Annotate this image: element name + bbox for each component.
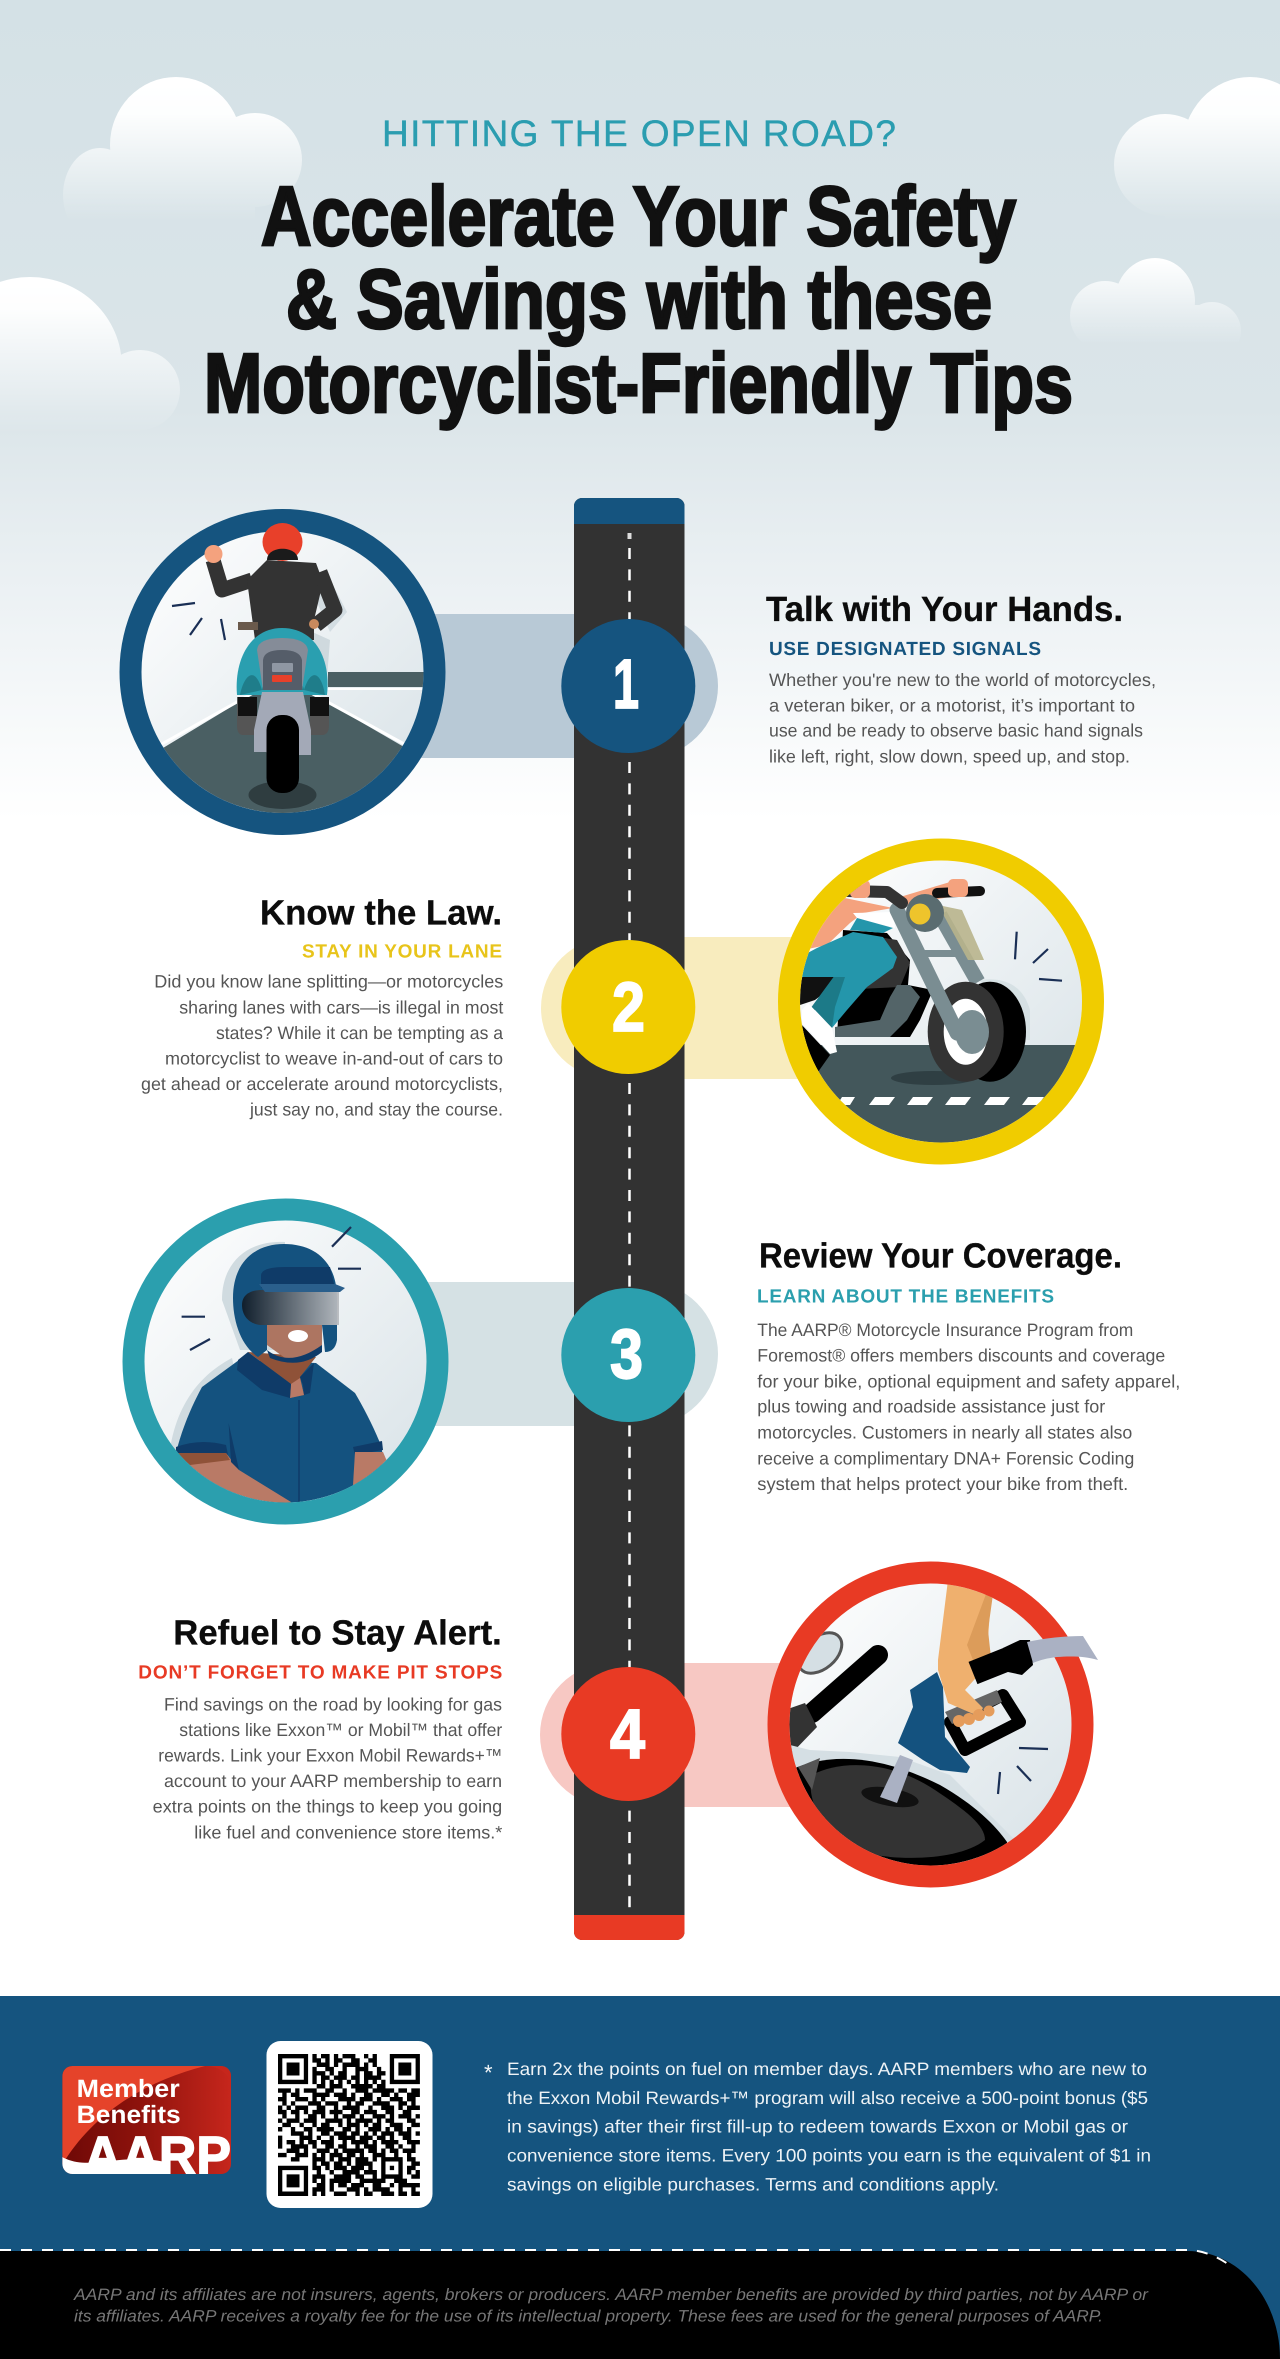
body copy: Did you know lane splitting—or motorcycles bbox=[154, 972, 503, 992]
body copy: Foremost® offers members discounts and coverage bbox=[757, 1346, 1165, 1366]
body copy bbox=[757, 1320, 1180, 1494]
footnote: in savings) after their first fill-up to redeem towards Exxon or Mobil gas or bbox=[507, 2116, 1128, 2136]
footnote: the Exxon Mobil Rewards+™ program will also receive a 500-point bonus ($5 bbox=[507, 2088, 1148, 2108]
step 1 text bbox=[766, 590, 1156, 766]
connector band 3 bbox=[400, 1282, 718, 1426]
illustration 3: smiling rider with helmet bbox=[134, 1210, 438, 1520]
subheading: STAY IN YOUR LANE bbox=[302, 942, 502, 963]
subheading: LEARN ABOUT THE BENEFITS bbox=[757, 1287, 1054, 1308]
sky background bbox=[0, 0, 1280, 1000]
body copy: motorcycles. Customers in nearly all states also bbox=[757, 1422, 1132, 1442]
title: & Savings with these bbox=[286, 252, 992, 346]
step 4 badge bbox=[561, 1667, 695, 1801]
body copy: just say no, and stay the course. bbox=[249, 1100, 503, 1120]
body copy: rewards. Link your Exxon Mobil Rewards+™ bbox=[158, 1746, 502, 1766]
footnote bbox=[484, 2059, 1151, 2194]
body copy: states? While it can be tempting as a bbox=[216, 1023, 504, 1043]
footnote: Earn 2x the points on fuel on member days. AARP members who are new to bbox=[507, 2059, 1147, 2079]
illustration 1: rider signalling, rear view bbox=[130, 520, 440, 830]
body copy: get ahead or accelerate around motorcyclists, bbox=[141, 1074, 503, 1094]
body copy: like fuel and convenience store items.* bbox=[194, 1822, 502, 1842]
AARP member benefits logo: Benefits bbox=[77, 2101, 181, 2129]
cloud: top right bbox=[1114, 77, 1280, 196]
footnote: savings on eligible purchases. Terms and conditions apply. bbox=[507, 2174, 999, 2194]
body copy bbox=[153, 1694, 502, 1842]
step 3 text bbox=[757, 1236, 1180, 1494]
body copy: plus towing and roadside assistance just for bbox=[757, 1397, 1105, 1417]
body copy bbox=[141, 972, 504, 1120]
footnote: convenience store items. Every 100 points you earn is the equivalent of $1 in bbox=[507, 2146, 1151, 2166]
disclaimer text: its affiliates. AARP receives a royalty fee for the use of its intellectual property. These fees are used for the general purposes of AARP. bbox=[74, 2308, 1103, 2326]
illustration 2: rider on motorcycle, side view bbox=[789, 850, 1100, 1155]
step 3 badge: 3 bbox=[610, 1315, 643, 1393]
eyebrow heading: HITTING THE OPEN ROAD? bbox=[382, 113, 896, 154]
disclaimer panel bbox=[0, 2250, 1280, 2359]
title: Accelerate Your Safety bbox=[261, 169, 1016, 263]
footnote: * bbox=[484, 2060, 493, 2085]
body copy: sharing lanes with cars—is illegal in most bbox=[179, 997, 503, 1017]
step 4 badge: 4 bbox=[610, 1695, 645, 1773]
title bbox=[204, 169, 1073, 430]
QR code bbox=[266, 2041, 432, 2208]
step 2 text bbox=[141, 893, 504, 1120]
body copy: system that helps protect your bike from theft. bbox=[757, 1474, 1128, 1494]
step 1 badge: 1 bbox=[613, 645, 639, 723]
step 3 badge bbox=[561, 1288, 695, 1422]
disclaimer text bbox=[73, 2286, 1150, 2326]
step 2 badge bbox=[561, 940, 695, 1074]
body copy: The AARP® Motorcycle Insurance Program from bbox=[757, 1320, 1133, 1340]
connector band 4 bbox=[540, 1663, 800, 1807]
fuel hose bbox=[1027, 1636, 1098, 1663]
step 1 badge bbox=[561, 619, 695, 753]
motion lines bbox=[1015, 932, 1062, 981]
body copy: for your bike, optional equipment and safety apparel, bbox=[757, 1371, 1180, 1391]
subheading: DON’T FORGET TO MAKE PIT STOPS bbox=[138, 1662, 502, 1683]
body copy: receive a complimentary DNA+ Forensic Coding bbox=[757, 1448, 1134, 1468]
motion lines bbox=[172, 603, 225, 640]
connector band 1 bbox=[400, 614, 718, 758]
cloud: left bbox=[0, 277, 180, 402]
heading: Refuel to Stay Alert. bbox=[173, 1613, 502, 1652]
heading: Talk with Your Hands. bbox=[766, 590, 1123, 629]
AARP member benefits logo bbox=[62, 2066, 231, 2174]
body copy: like left, right, slow down, speed up, and stop. bbox=[769, 746, 1130, 766]
title: Motorcyclist-Friendly Tips bbox=[204, 336, 1073, 430]
footer panel bbox=[0, 1996, 1280, 2359]
AARP member benefits logo: Member bbox=[77, 2075, 180, 2103]
body copy: stations like Exxon™ or Mobil™ that offer bbox=[179, 1720, 502, 1740]
body copy: Whether you're new to the world of motorcycles, bbox=[769, 670, 1156, 690]
cloud: right small bbox=[1070, 258, 1240, 324]
road bbox=[574, 498, 684, 1940]
step 4 text bbox=[138, 1613, 502, 1842]
body copy: extra points on the things to keep you going bbox=[153, 1797, 502, 1817]
cloud: top left bbox=[63, 77, 302, 196]
heading: Review Your Coverage. bbox=[759, 1236, 1122, 1275]
motion lines bbox=[998, 1748, 1048, 1794]
body copy: account to your AARP membership to earn bbox=[164, 1771, 502, 1791]
body copy: motorcyclist to weave in-and-out of cars to bbox=[165, 1048, 503, 1068]
connector band 2 bbox=[541, 937, 800, 1079]
AARP member benefits logo: AARP bbox=[84, 2126, 231, 2186]
body copy: Find savings on the road by looking for gas bbox=[164, 1694, 502, 1714]
body copy: a veteran biker, or a motorist, it’s important to bbox=[769, 695, 1135, 715]
subheading: USE DESIGNATED SIGNALS bbox=[769, 639, 1041, 660]
illustration 4: hand refuelling motorcycle bbox=[778, 1572, 1098, 1890]
disclaimer text: AARP and its affiliates are not insurers, agents, brokers or producers. AARP member benefits are provided by third parties, not by AARP or bbox=[73, 2286, 1150, 2304]
body copy bbox=[769, 670, 1156, 766]
rider and motorcycle bbox=[204, 523, 347, 793]
motion lines bbox=[182, 1227, 361, 1350]
step 2 badge: 2 bbox=[612, 968, 645, 1046]
body copy: use and be ready to observe basic hand signals bbox=[769, 721, 1143, 741]
heading: Know the Law. bbox=[260, 893, 502, 932]
